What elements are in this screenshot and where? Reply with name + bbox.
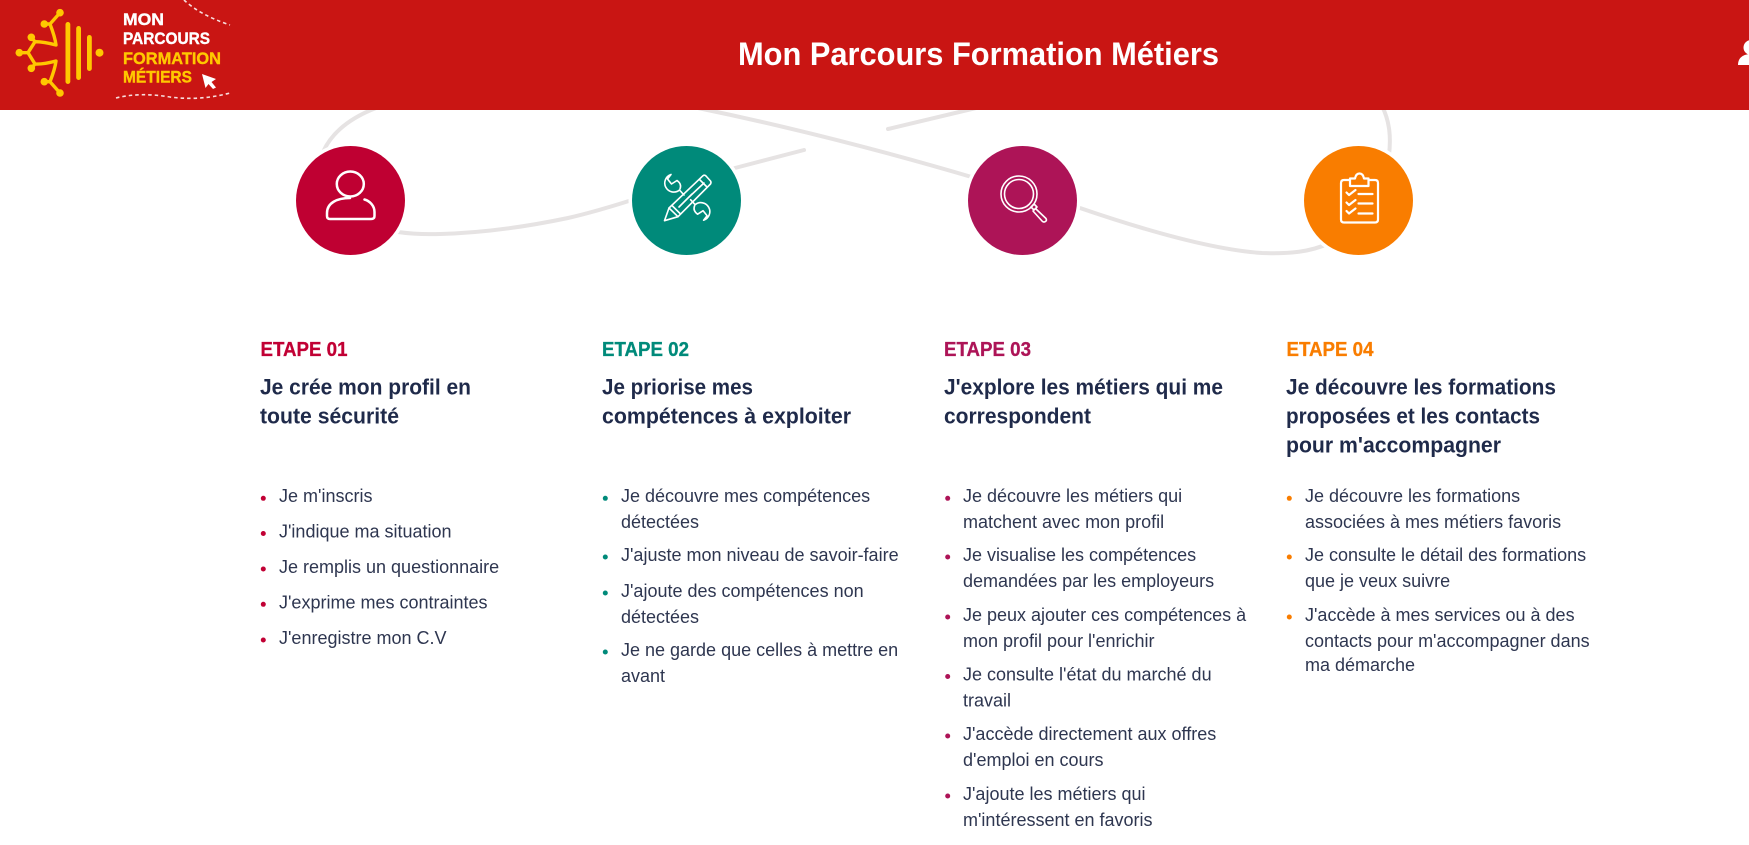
heading: step 01: toute sécurité	[260, 404, 399, 428]
list: step 03 actions: mon profil pour l'enrichir	[963, 631, 1155, 651]
list: step 04 actions: Je découvre les formations	[1305, 486, 1520, 506]
heading: step 03: correspondent	[944, 404, 1092, 428]
list: step 01 actions: J'indique ma situation	[279, 522, 452, 542]
heading: step 02: compétences à exploiter	[602, 404, 851, 428]
list: step 01 actions	[261, 486, 499, 648]
label: etape 02: ETAPE 02	[602, 338, 689, 361]
list: step 03 actions	[945, 486, 1247, 830]
list: step 02 actions: J'ajoute des compétences non	[621, 581, 864, 601]
list: step 02 actions: Je découvre mes compétences	[621, 486, 870, 506]
logo wordmark	[123, 10, 221, 86]
list: step 01 actions: J'enregistre mon C.V	[279, 628, 447, 648]
list: step 01 actions: Je remplis un questionnaire	[279, 557, 499, 577]
heading: step 01: Je crée mon profil en	[260, 374, 471, 400]
heading: step 04: Je découvre les formations	[1286, 374, 1556, 400]
heading: step 03	[944, 374, 1223, 428]
list: step 02 actions: détectées	[621, 607, 699, 627]
list: step 03 actions: J'ajoute les métiers qui	[963, 784, 1146, 804]
list: step 04 actions: J'accède à mes services ou à des	[1305, 605, 1575, 625]
heading: step 04	[1286, 374, 1556, 458]
list: step 01 actions: J'exprime mes contraintes	[279, 592, 488, 612]
logo dashed lines	[116, 0, 230, 98]
icon: profile in red circle	[292, 142, 408, 258]
list: step 03 actions: matchent avec mon profil	[963, 512, 1164, 532]
panel: step 02	[602, 142, 899, 686]
logo wordmark: MON	[123, 10, 164, 29]
list: step 03 actions: Je consulte l'état du marché du	[963, 664, 1212, 684]
list: step 04 actions: contacts pour m'accompagner dans	[1305, 631, 1590, 651]
winding path behind the steps	[323, 106, 1390, 253]
page title: Mon Parcours Formation Métiers	[738, 36, 1219, 72]
icon: checklist clipboard in orange circle	[1300, 142, 1416, 258]
logo wordmark: FORMATION	[123, 49, 221, 68]
heading: step 02	[602, 374, 851, 428]
list: step 01 actions: Je m'inscris	[279, 486, 372, 506]
logo: Mon Parcours Formation Métiers	[15, 0, 230, 98]
list: step 03 actions: travail	[963, 690, 1011, 710]
heading: step 02: Je priorise mes	[602, 374, 753, 400]
list: step 02 actions: détectées	[621, 512, 699, 532]
panel: step 01	[260, 142, 499, 648]
header bar	[0, 0, 1749, 110]
logo wordmark: MÉTIERS	[123, 68, 192, 86]
list: step 03 actions: m'intéressent en favoris	[963, 810, 1153, 830]
icon: user account	[1738, 40, 1749, 65]
list: step 03 actions: J'accède directement aux offres	[963, 724, 1216, 744]
list: step 04 actions: ma démarche	[1305, 655, 1415, 675]
label: etape 01: ETAPE 01	[260, 338, 348, 361]
icon: magnifying glass in magenta circle	[964, 142, 1080, 258]
list: step 03 actions: demandées par les employeurs	[963, 571, 1214, 591]
icon: pencil and wrench in teal circle	[628, 142, 744, 258]
heading: step 04: pour m'accompagner	[1286, 432, 1501, 458]
list: step 04 actions: Je consulte le détail des formations	[1305, 545, 1586, 565]
list: step 03 actions: Je découvre les métiers qui	[963, 486, 1182, 506]
heading: step 04: proposées et les contacts	[1286, 404, 1540, 428]
heading: step 03: J'explore les métiers qui me	[944, 374, 1223, 400]
list: step 04 actions: associées à mes métiers favoris	[1305, 512, 1561, 532]
list: step 04 actions: que je veux suivre	[1305, 571, 1450, 591]
list: step 02 actions: Je ne garde que celles à mettre en	[621, 640, 898, 660]
list: step 03 actions: Je visualise les compétences	[963, 545, 1196, 565]
list: step 04 actions	[1287, 486, 1590, 675]
list: step 02 actions: J'ajuste mon niveau de savoir-faire	[621, 545, 899, 565]
list: step 02 actions	[603, 486, 899, 686]
list: step 02 actions: avant	[621, 666, 665, 686]
logo wordmark: PARCOURS	[123, 29, 210, 48]
panel: step 03	[944, 142, 1247, 830]
label: etape 04: ETAPE 04	[1286, 338, 1374, 361]
list: step 03 actions: Je peux ajouter ces compétences à	[963, 605, 1247, 625]
logo emblem: Occitan cross and sound bars	[15, 9, 103, 97]
heading: step 01	[260, 374, 471, 428]
list: step 03 actions: d'emploi en cours	[963, 750, 1104, 770]
panel: step 04	[1286, 142, 1590, 675]
logo cursor arrow	[202, 74, 216, 89]
label: etape 03: ETAPE 03	[944, 338, 1031, 361]
